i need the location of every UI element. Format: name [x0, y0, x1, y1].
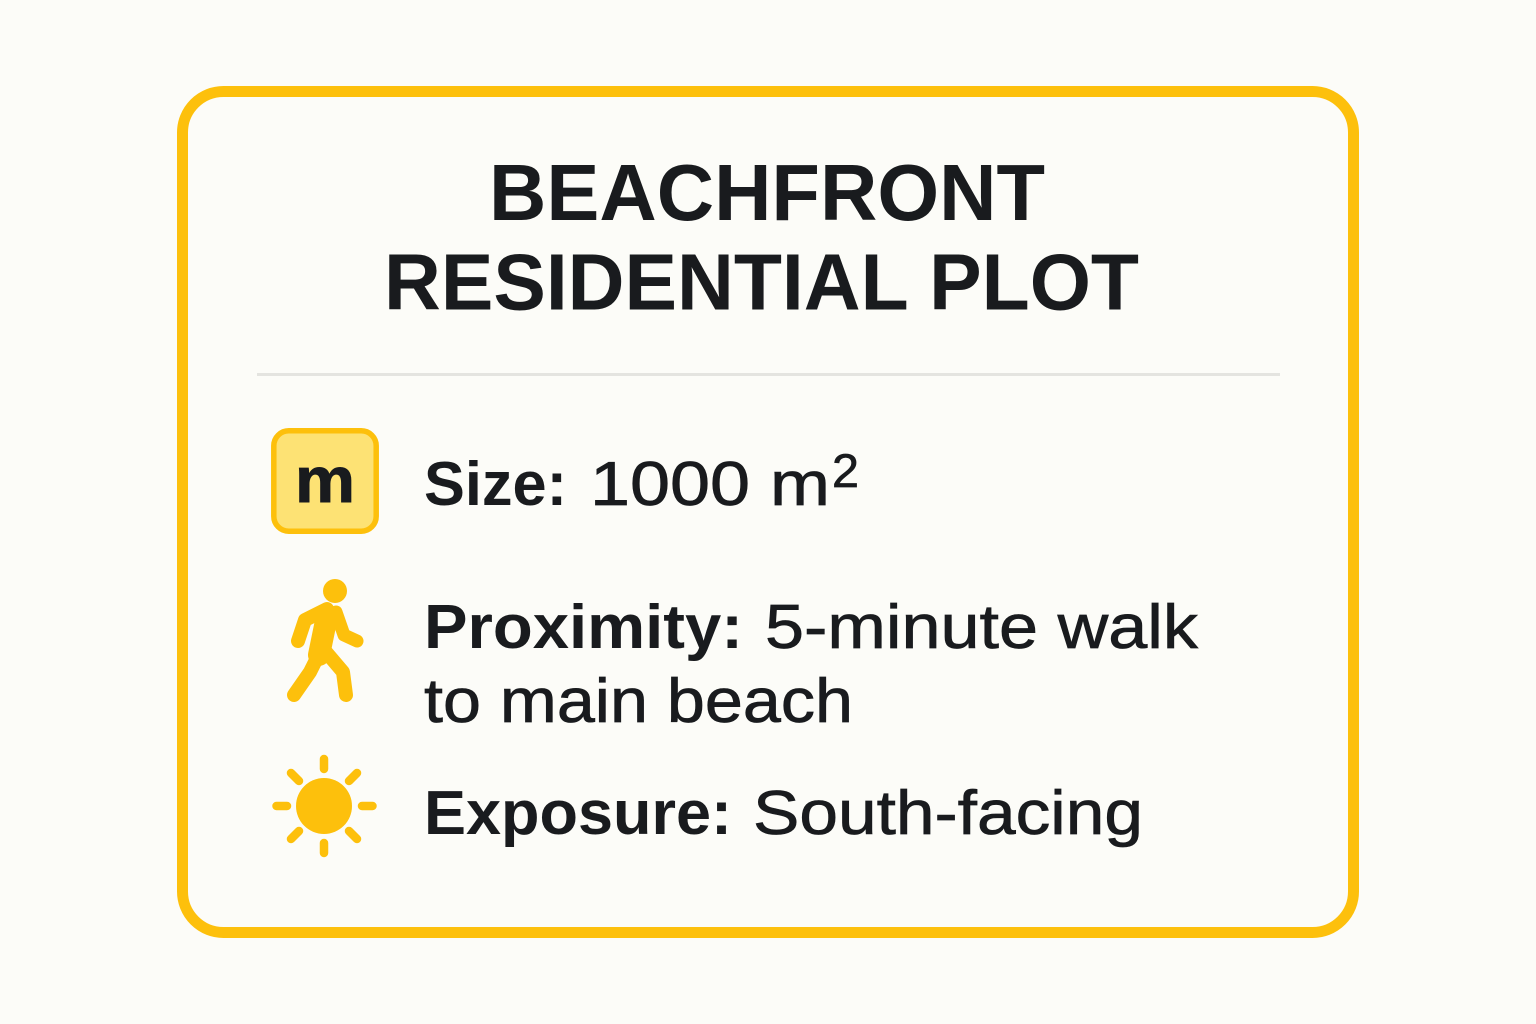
panel: plot card: [182, 92, 1354, 932]
title: [384, 148, 1139, 326]
text: proximity: to main beach: [424, 667, 853, 736]
icon: metre badge: [274, 431, 376, 531]
icon: sun: [276, 759, 372, 853]
text: exposure: South-facing: [753, 779, 1143, 848]
text: size: Size:: [424, 450, 567, 519]
title: RESIDENTIAL PLOT: [384, 238, 1139, 326]
text: size: 2: [832, 444, 859, 497]
text: size: [424, 444, 859, 519]
text: proximity: 5-minute walk: [765, 593, 1199, 662]
text: proximity: Proximity:: [424, 593, 743, 662]
icon: metre badge: m: [295, 444, 355, 516]
text: exposure: Exposure:: [424, 779, 732, 848]
text: exposure: [424, 779, 1143, 848]
text: proximity: [424, 593, 1199, 736]
title: BEACHFRONT: [489, 148, 1045, 237]
text: size: 1000 m: [590, 450, 830, 519]
icon: walking person: [294, 579, 357, 695]
